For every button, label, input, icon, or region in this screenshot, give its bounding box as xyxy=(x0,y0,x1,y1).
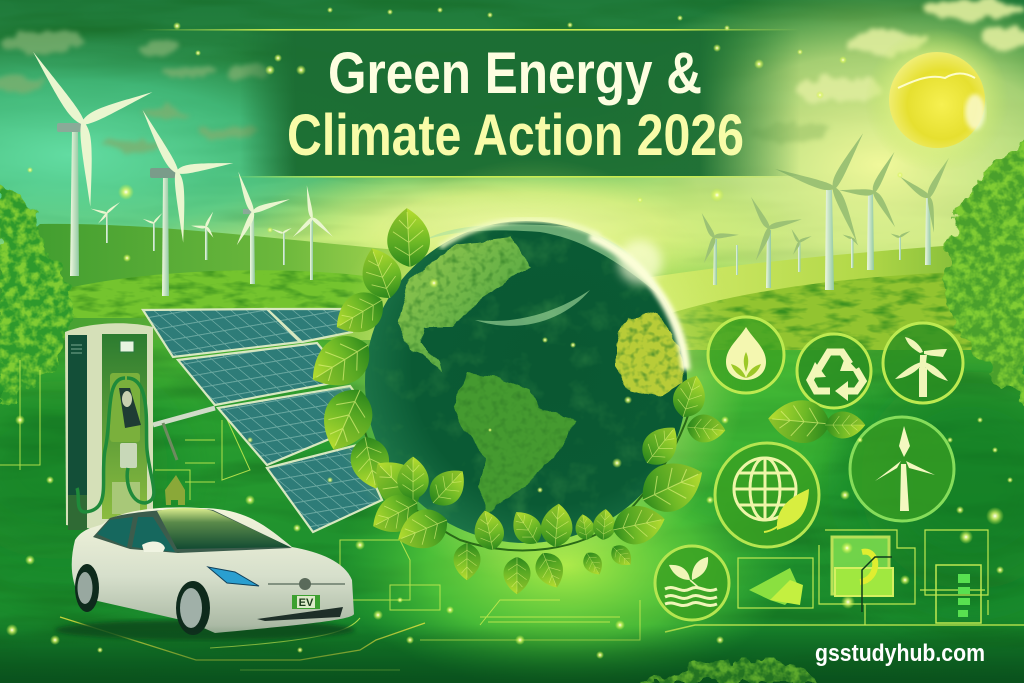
trees left xyxy=(0,185,72,405)
windshield xyxy=(157,508,290,549)
trees right xyxy=(947,140,1024,405)
front wheel xyxy=(176,581,210,635)
icon: water drop xyxy=(708,317,784,393)
globe glow xyxy=(323,158,747,582)
small post xyxy=(165,475,185,505)
icon: recycle xyxy=(797,334,871,408)
side window xyxy=(132,517,175,552)
icon: large wind turbine xyxy=(850,417,954,521)
wind turbines: left group xyxy=(28,50,335,296)
stems xyxy=(360,400,690,550)
wind turbines: right group xyxy=(699,131,951,290)
hills xyxy=(0,224,1024,350)
icon: wind turbine small xyxy=(883,323,963,403)
globe xyxy=(365,220,687,543)
title text: Green Energy & xyxy=(328,41,702,106)
bottom bushes xyxy=(640,660,815,683)
badge xyxy=(299,578,311,590)
licence plate: EV xyxy=(299,597,314,609)
mirror xyxy=(142,542,165,552)
clouds xyxy=(0,0,1024,150)
circuit boxes xyxy=(738,530,988,625)
leaf wreath xyxy=(300,207,727,594)
electric car xyxy=(55,507,355,640)
title text: Climate Action 2026 xyxy=(287,103,744,168)
title banner xyxy=(140,29,800,178)
bottom shading xyxy=(0,625,1024,683)
north america xyxy=(397,237,530,373)
icon: decorative leaf xyxy=(766,397,865,445)
circuit lines decoration xyxy=(0,360,1024,670)
rear wheel xyxy=(75,564,99,612)
website credit: gsstudyhub.com xyxy=(815,640,985,667)
licence plate xyxy=(292,595,320,609)
headlight xyxy=(208,567,259,586)
clouds on globe xyxy=(425,224,665,326)
window surround xyxy=(93,509,292,553)
leaf chip xyxy=(749,568,803,605)
south america xyxy=(453,373,577,517)
solar panels xyxy=(143,309,382,532)
africa xyxy=(615,313,683,397)
icon: globe and leaf xyxy=(715,443,819,547)
circuit chip xyxy=(832,537,893,596)
EV charging station xyxy=(65,323,154,530)
rear window xyxy=(97,517,133,547)
icon: plant and water xyxy=(655,546,729,620)
grille xyxy=(257,607,343,621)
charging cable xyxy=(77,378,154,512)
sun xyxy=(865,28,1009,172)
status blocks xyxy=(958,574,970,617)
title text xyxy=(287,41,744,168)
